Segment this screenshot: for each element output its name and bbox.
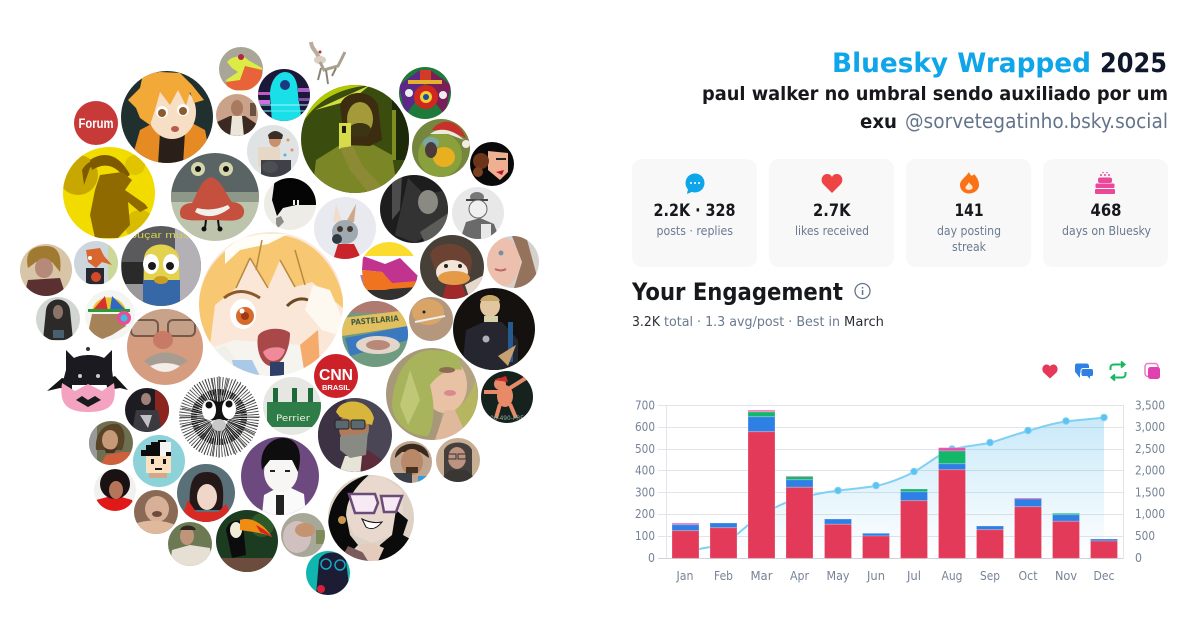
avatar: cat with propeller hat [85, 290, 135, 340]
chart: engagement bars and cumulative line [635, 398, 1165, 583]
avatar: painted long-hair man [89, 421, 133, 465]
icon: flame [960, 172, 979, 194]
avatar: goat skeleton sprite [311, 42, 345, 84]
avatar: old man with glasses [127, 309, 203, 385]
avatar: man with glasses outdoors [168, 522, 212, 566]
avatar: CNN Brasil logo [314, 354, 358, 398]
month labels: May [826, 569, 850, 583]
avatar: crash bandicoot toy [74, 241, 118, 285]
panel: day posting streak: day posting [937, 223, 1001, 238]
left axis labels [635, 398, 655, 565]
icon: reposts arrows [1110, 362, 1126, 380]
avatar: purple illustrated man [241, 437, 319, 517]
month labels: Apr [790, 569, 809, 583]
avatar: yellow goat [58, 147, 155, 240]
icon: replies bubbles [1075, 364, 1094, 380]
icon: quotes pages [1145, 364, 1160, 379]
avatar: green haired woman [386, 348, 480, 440]
profile name and handle: @sorvetegatinho.bsky.social [905, 109, 1168, 133]
avatar: parrot with santa hat [412, 119, 470, 177]
panel: posts and replies: 2.2K · 328 [654, 201, 736, 221]
avatar: black hair blob [264, 178, 316, 230]
profile name and handle: paul walker no umbral sendo auxiliado por um [702, 83, 1168, 105]
right axis labels: 1,500 [1135, 486, 1165, 500]
right axis labels: 1,000 [1135, 507, 1165, 521]
engagement summary: March [844, 314, 884, 330]
avatar: Forum logo [74, 101, 118, 145]
left axis labels: 700 [635, 398, 655, 412]
panel: day posting streak: streak [952, 239, 987, 254]
avatar: Pastelaria magazine [342, 301, 408, 367]
avatar: person selfie on dotted wall [247, 125, 299, 180]
panel: days on Bluesky: 468 [1090, 201, 1122, 221]
avatar: blurry blonde [134, 490, 178, 534]
avatar: rabbit with gas mask [314, 197, 376, 260]
avatar: tired man [390, 441, 432, 485]
panel: likes received: likes received [795, 223, 869, 238]
title: 2025 [1100, 48, 1167, 79]
avatar: Perrier bottles [263, 377, 321, 435]
right axis labels: 500 [1135, 529, 1155, 543]
engagement summary: total · 1.3 avg/post · Best in [664, 314, 840, 330]
avatar: Forum logo: Forum [78, 115, 114, 131]
avatar: CNN Brasil logo: CNN [319, 367, 353, 384]
right axis labels: 2,500 [1135, 442, 1165, 456]
left axis labels: 500 [635, 442, 655, 456]
avatar: man in hood [436, 438, 480, 482]
avatar: bowler hat sketch [452, 187, 504, 240]
month labels: Sep [980, 569, 1000, 583]
profile name and handle [702, 83, 1168, 133]
avatar: woman close-up [486, 236, 539, 288]
avatar: bat pumpkin plush [47, 347, 128, 412]
avatar: pixel art boy [133, 435, 185, 487]
month labels: Nov [1055, 569, 1077, 583]
panel: days on Bluesky [1043, 159, 1168, 267]
panel: day posting streak: 141 [954, 201, 984, 221]
avatar: Pastelaria magazine: PASTELARIA [350, 314, 400, 327]
avatar: long haired man [36, 297, 80, 341]
left axis labels: 300 [635, 486, 655, 500]
engagement summary: 3.2K [632, 314, 661, 330]
left axis labels: 0 [648, 551, 655, 565]
avatar: small cat [409, 297, 453, 341]
avatar: woman in red [177, 464, 235, 522]
right axis labels: 0 [1135, 551, 1142, 565]
heading: Your Engagement: Your Engagement [631, 278, 843, 306]
avatar: man in brown jacket [216, 94, 258, 137]
avatar: red cartoon blob [171, 153, 259, 241]
avatar: bearded man yellow hat [318, 398, 392, 476]
month labels: Aug [942, 569, 962, 583]
month labels: Feb [714, 569, 733, 583]
avatar: man with guitar, dark [453, 288, 535, 370]
month labels: Jan [676, 569, 694, 583]
avatar: red devil figure: 00-490-FRE [490, 415, 524, 422]
panel: likes received: 2.7K [813, 201, 851, 221]
cumulative line [682, 414, 1107, 555]
month labels [676, 569, 1114, 583]
avatar: venom shirt selfie [125, 388, 169, 432]
avatar: comic woman [470, 142, 514, 186]
avatar: curly hair person [20, 244, 72, 296]
avatar: felted minion: ouçar musi [130, 230, 192, 240]
panel: likes received [769, 159, 894, 267]
icon: info [855, 284, 870, 298]
left axis labels: 100 [635, 529, 655, 543]
avatar: curly haired woman in red [94, 469, 136, 511]
month labels: Dec [1094, 569, 1114, 583]
panel: day posting streak [906, 159, 1031, 267]
avatar: chibi girl [420, 235, 484, 300]
avatar: yellow cartoon creature [219, 47, 263, 92]
avatar: CNN Brasil logo: BRASIL [322, 385, 351, 392]
avatar: big anime girl [199, 232, 345, 376]
title: Bluesky Wrapped [832, 48, 1091, 79]
avatar: Perrier bottles: Perrier [276, 414, 310, 424]
avatar: darth vader with glasses [306, 551, 350, 595]
month labels: Jun [866, 569, 885, 583]
avatar: spiky fuzzy creature [180, 376, 260, 458]
panel: posts and replies [632, 159, 757, 267]
avatar: red devil figure [481, 371, 533, 423]
avatar: anime boy with orange hair [121, 71, 213, 165]
icon: speech bubble [686, 174, 704, 194]
stacked bars [672, 410, 1118, 558]
legend icons [1042, 362, 1160, 380]
avatar: dark monochrome print [380, 175, 450, 243]
avatar: clown [399, 67, 451, 119]
avatar: selfie man in green [301, 85, 409, 197]
avatar: cyan ghost glitch [258, 69, 310, 122]
right axis labels: 2,000 [1135, 464, 1165, 478]
avatar: felted minion [121, 226, 201, 306]
left axis labels: 400 [635, 464, 655, 478]
profile name and handle: exu [860, 111, 897, 133]
left axis labels: 200 [635, 507, 655, 521]
avatar: toucan [216, 510, 278, 572]
icon: likes heart [1042, 364, 1058, 378]
avatar: sheep [281, 513, 325, 557]
left axis labels: 600 [635, 420, 655, 434]
panel: days on Bluesky: days on Bluesky [1062, 223, 1152, 238]
icon: heart [822, 174, 842, 193]
right axis labels [1135, 398, 1165, 565]
right axis labels: 3,000 [1135, 420, 1165, 434]
right axis labels: 3,500 [1135, 398, 1165, 412]
avatar: pink shoe [360, 242, 418, 300]
avatar: woman with pink glasses [328, 474, 414, 561]
avatar cluster [20, 42, 539, 595]
month labels: Oct [1018, 569, 1038, 583]
month labels: Jul [906, 569, 921, 583]
icon: cake [1095, 172, 1115, 194]
month labels: Mar [750, 569, 773, 583]
panel: posts and replies: posts · replies [656, 223, 733, 238]
cumulative area [685, 418, 1104, 558]
